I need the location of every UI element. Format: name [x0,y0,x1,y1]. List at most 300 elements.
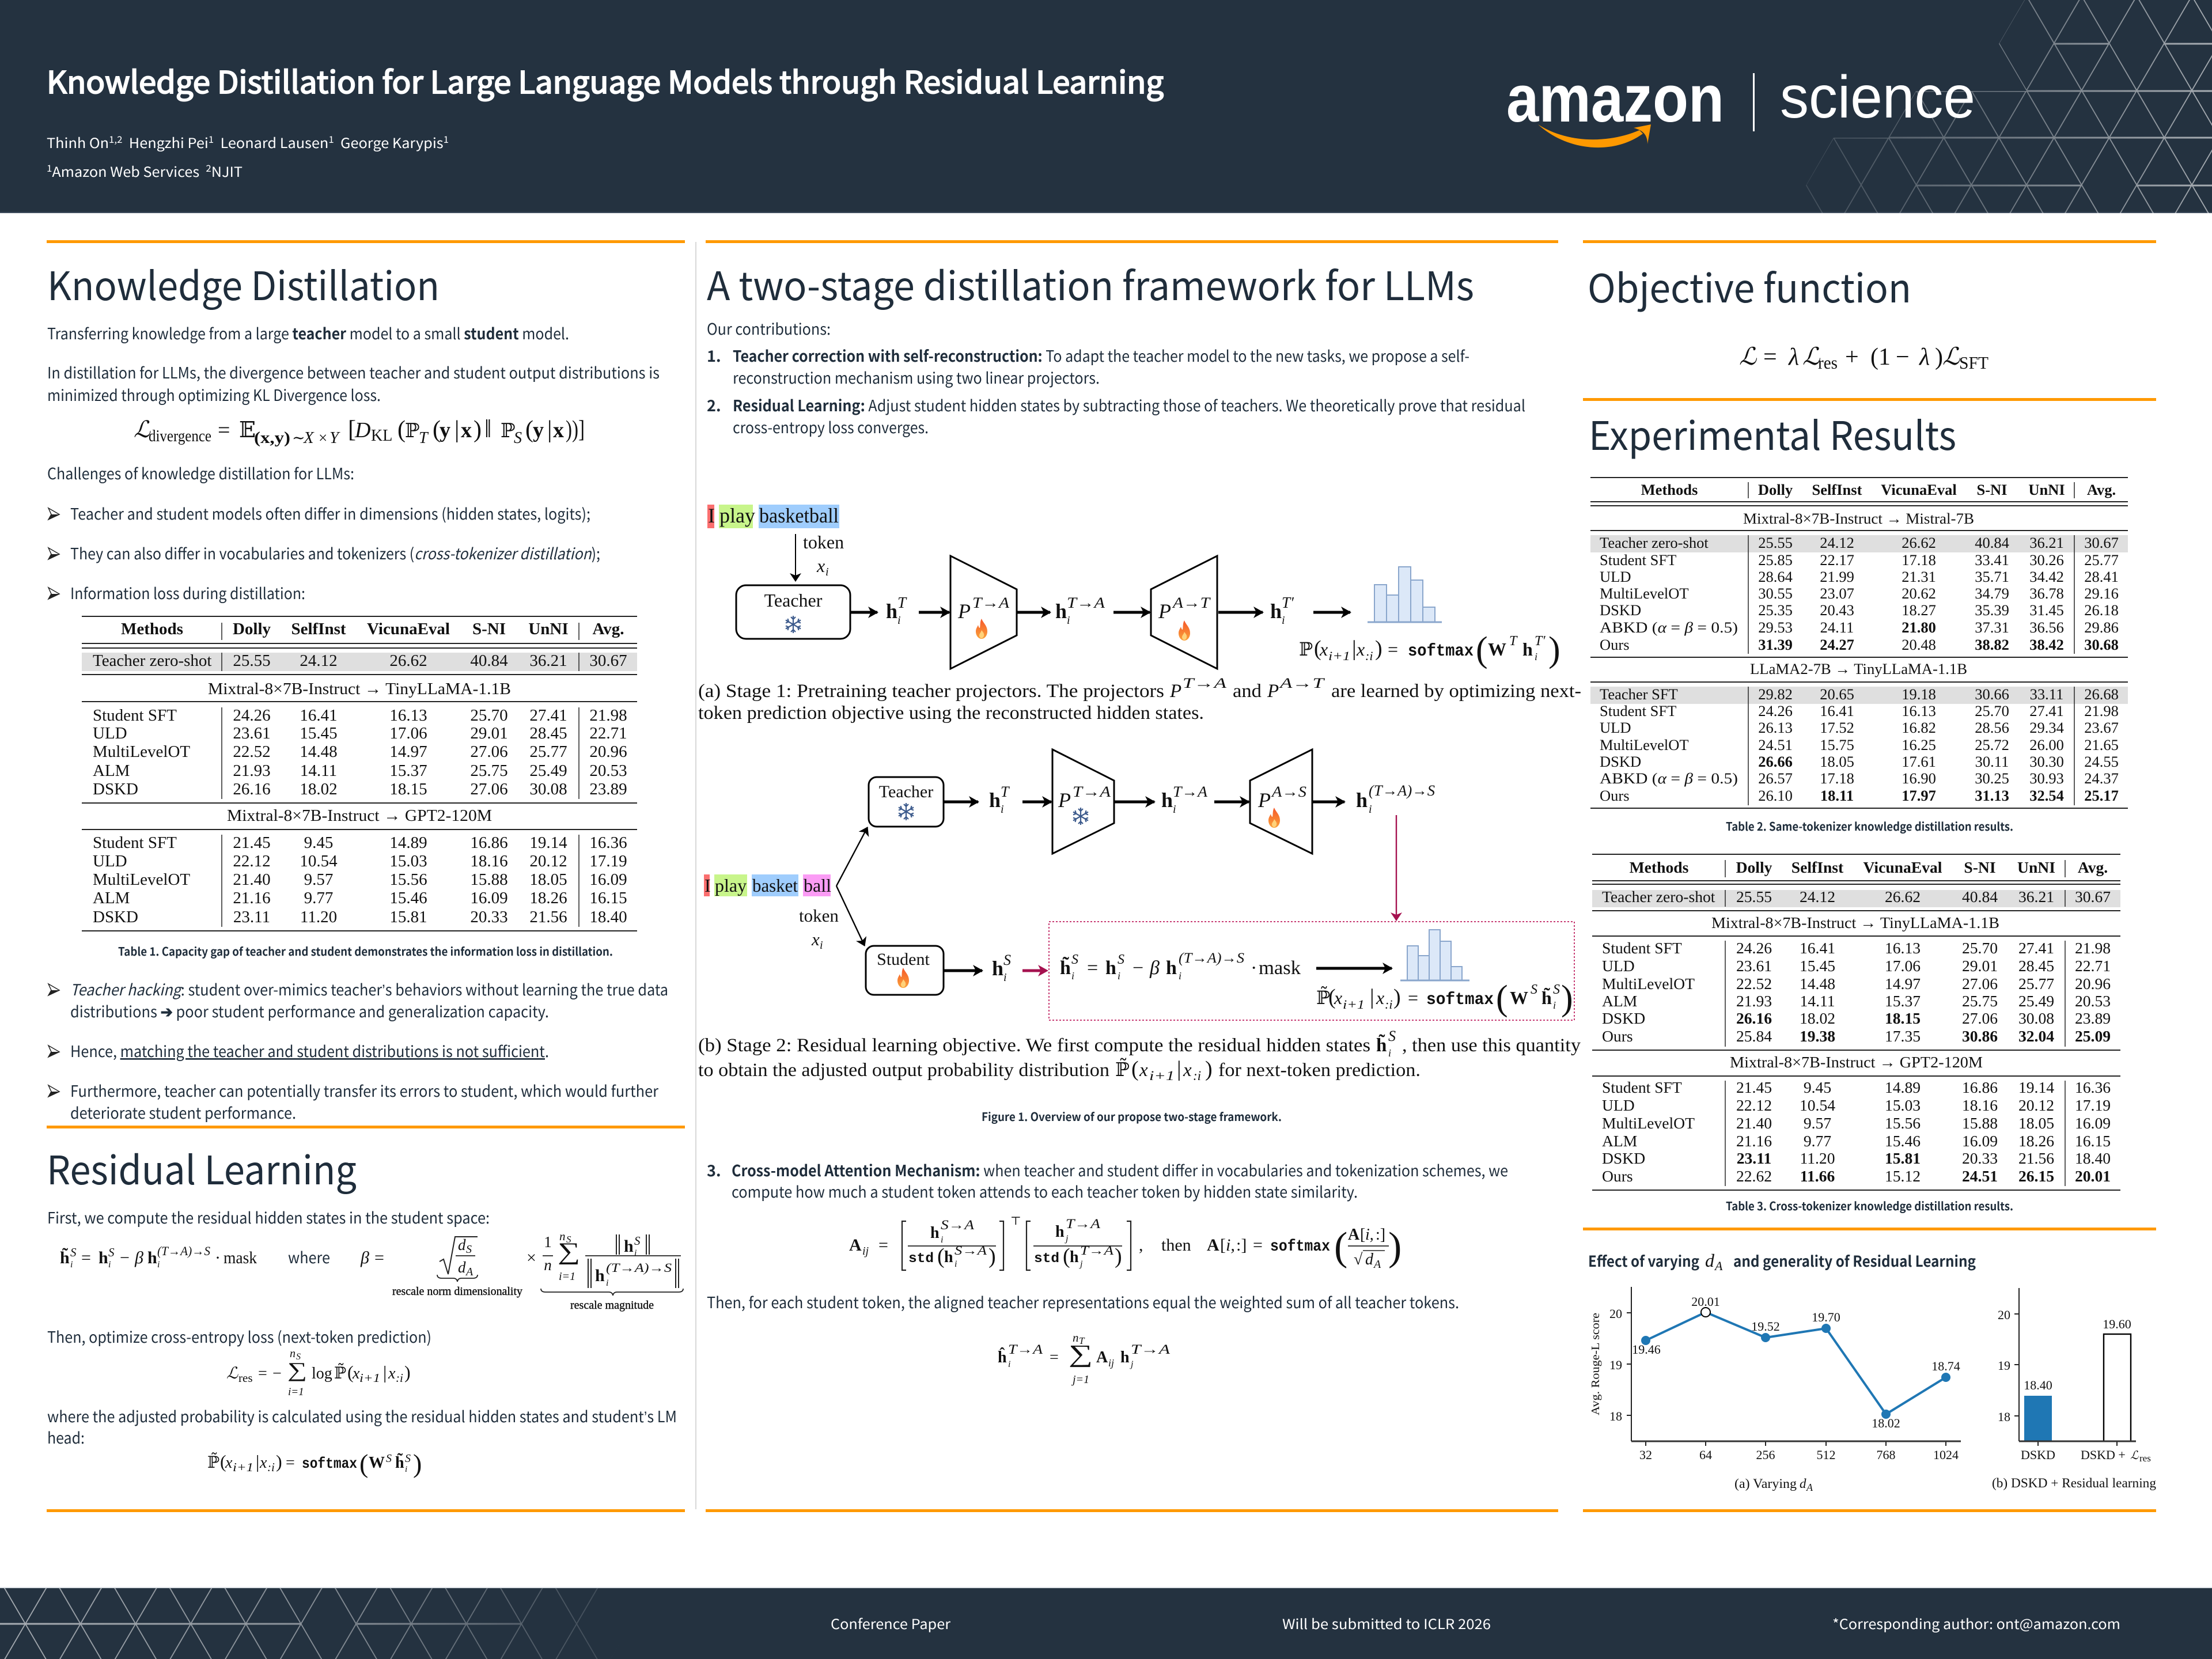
table 3: 16.36 [2075,1078,2111,1096]
figure b: stage 2 diagram: P [1058,789,1071,812]
table 2: LLaMA2-7B → TinyLLaMA-1.1B [1750,660,1967,677]
formula: residual hidden state: i [108,1260,111,1270]
bar chart: DSKD vs residual learning: DSKD [2021,1448,2055,1462]
table 3: 20.12 [2018,1096,2054,1114]
table 3: 18.40 [2075,1149,2111,1167]
figure a: stage 1 diagram: play [719,504,755,527]
table 1: 21.16 [233,889,271,907]
table 1: 30.67 [589,652,627,670]
figure a: stage 1 diagram: ) [1375,637,1382,661]
table 2: Teacher zero-shot [1600,534,1709,551]
table 1: 16.15 [589,889,627,907]
figure b caption: i [1388,1047,1391,1059]
table 1: 15.56 [389,870,427,889]
table 2: 24.26 [1758,702,1793,719]
formula: attention matrix: then [1161,1236,1191,1255]
table 3: 15.03 [1885,1096,1921,1114]
figure b: stage 2 diagram: Student [877,950,930,969]
icon: snowflake [786,616,801,633]
table 1: 36.21 [529,652,567,670]
figure a: stage 1 diagram: softmax [1408,642,1474,661]
figure b: stage 2 diagram: ( [1496,979,1508,1018]
line chart: varying dA: 19.70 [1812,1310,1840,1324]
title: Knowledge Distillation for Large Language Models through Residual Learning [47,59,1164,103]
line chart: varying dA: 19.46 [1632,1342,1661,1357]
figure b: stage 2 diagram: x [1334,987,1342,1008]
table 3: 14.97 [1885,975,1921,993]
formula: KL divergence: y [533,418,544,442]
formula: attention matrix: ( [1063,1244,1070,1268]
formula: attention matrix: T→A [1066,1217,1101,1231]
authors: Leonard Lausen [214,132,328,152]
formula: KL divergence: (x,y) [254,429,290,447]
formula: residual hidden state: S [566,1234,571,1245]
heading: Residual Learning [47,1139,357,1196]
figure a: stage 1 diagram: x [816,555,825,576]
table 3: 21.45 [1736,1078,1772,1096]
table 2: 23.07 [1820,585,1854,602]
formula: adjusted probability: ) [276,1451,282,1472]
table 2: 28.64 [1758,568,1793,585]
table 3: 32.04 [2018,1027,2054,1045]
table 2: 31.45 [2029,601,2064,619]
formula: attention matrix: ) [1388,1225,1402,1269]
figure b: stage 2 diagram: x [1376,987,1384,1008]
formula: adjusted probability: ℙ̃ [207,1452,219,1472]
table 2: Avg. [2087,481,2116,498]
table 2: 25.35 [1758,601,1793,619]
formula: objective: ℒ [1739,342,1757,370]
table 2: VicunaEval [1881,481,1957,498]
amazon science logo: science [1780,64,1975,131]
table 3: 40.84 [1962,888,1998,906]
formula: attention matrix: A [1207,1236,1219,1255]
table 3: 19.14 [2018,1078,2054,1096]
table 1: SelfInst [291,620,346,638]
figure a: stage 1 diagram: basketball [759,504,839,527]
table 3: 15.37 [1885,992,1921,1010]
figure b caption: :i [1193,1069,1201,1083]
table 3: 20.33 [1962,1149,1998,1167]
formula: objective: ℒ [1942,342,1960,370]
formula: residual loss: :i [396,1371,403,1385]
figure b: stage 2 diagram: − [1132,957,1143,979]
formula: KL divergence: × [319,429,327,446]
table 3: ALM [1602,1132,1637,1150]
table 3: 25.70 [1962,939,1998,957]
table 3: Avg. [2078,858,2108,876]
table 3: 25.84 [1736,1027,1772,1045]
figure b: stage 2 diagram: | [1370,985,1374,1009]
figure b caption: ( [1131,1057,1139,1081]
authors: 1 [209,132,214,146]
authors: Hengzhi Pei [122,132,209,152]
table 1: 18.15 [389,780,427,798]
figure a: stage 1 diagram: ( [1476,630,1488,669]
formula: residual hidden state: rescale magnitude [570,1299,654,1312]
table 1: 21.45 [233,834,271,852]
table 2: 36.56 [2029,619,2064,636]
bullet list: teacher hacking [48,978,668,1123]
figure b: stage 2 diagram [704,749,1574,1020]
table 3: 26.16 [1736,1009,1772,1027]
figure b: stage 2 diagram: basket [752,875,798,896]
table 2: 24.37 [2084,770,2119,787]
authors: George Karypis [334,132,444,152]
formula: aligned representation: j=1 [1071,1373,1089,1386]
table 2: 21.80 [1902,619,1936,636]
table 1: ULD [93,852,127,870]
table 2: 20.43 [1820,601,1854,619]
table 1: 20.12 [529,852,567,870]
table 2: 23.67 [2084,719,2119,736]
contributions list: Teacher correction with self-reconstruction: To adapt the teacher model to the new tasks, we propose a self- [733,344,1469,366]
table 3: 17.06 [1885,957,1921,975]
contributions list: reconstruction mechanism using two linear projectors. [733,366,1100,388]
chart title: Effect of varying [1588,1250,1699,1271]
bar chart: DSKD vs residual learning: 18.40 [2024,1378,2052,1392]
item 3: cross-model attention: compute how much a student token attends to each teacher token by hidden state similarity. [732,1180,1358,1202]
formula: KL divergence: x [553,418,564,442]
table 3: 24.12 [1800,888,1835,906]
table 3: 10.54 [1800,1096,1835,1114]
table 1: Mixtral-8×7B-Instruct → TinyLLaMA-1.1B [208,680,511,698]
table 3: 15.12 [1885,1167,1921,1185]
figure a: stage 1 diagram: h [1522,639,1533,660]
table 3: 19.38 [1800,1027,1835,1045]
figure b: stage 2 diagram: token [799,906,839,926]
table 1: 9.57 [304,870,333,889]
table 1: MultiLevelOT [93,870,190,889]
figure a: stage 1 diagram: ) [1548,630,1560,669]
formula: attention matrix: i [955,1259,957,1269]
table 1: 23.61 [233,724,271,743]
table 1: 18.02 [300,780,338,798]
footer: contact: *Corresponding author: ont@amazon.com [1832,1613,2120,1633]
formula: attention matrix: S→A [941,1218,975,1232]
table 1: 11.20 [300,908,337,926]
figure b: stage 2 diagram: play [715,875,747,896]
formula: KL divergence: ) [474,416,482,443]
table 3: 22.12 [1736,1096,1772,1114]
formula: objective: res [1818,353,1838,373]
figure a caption: T→A [1183,676,1227,691]
figure a: stage 1 diagram: T [897,594,907,611]
formula: residual loss: ∑ [287,1358,307,1381]
table 2 [1590,478,2128,808]
table 1: 22.12 [233,852,271,870]
formula: residual hidden state: i [606,1278,608,1288]
formula: aligned representation: n [1073,1331,1078,1344]
table 1: 16.41 [300,706,338,725]
formula: objective: = [1763,344,1777,370]
table 1: VicunaEval [367,620,450,638]
bullet list: challenges: Information loss during distillation: [70,581,305,604]
bullet list: teacher hacking: Furthermore, teacher can potentially transfer its errors to student, which would further [70,1079,658,1101]
line chart: varying dA: A [1806,1482,1813,1493]
formula: residual loss: ℙ̃ [334,1363,346,1382]
formula: KL divergence: ℙ [501,419,516,442]
table 2: 25.70 [1975,702,2009,719]
table 1: 14.89 [389,834,427,852]
formula: adjusted probability: = [286,1454,295,1472]
formula: residual loss: x [352,1365,360,1382]
figure b: stage 2 diagram: h [1166,957,1177,979]
formula: residual loss: x [388,1365,396,1382]
formula: aligned representation: i [1008,1359,1010,1369]
table 3: Student SFT [1602,939,1682,957]
table 1: 16.86 [470,834,508,852]
table 2: 21.31 [1902,568,1936,585]
formula: attention matrix: [ [1360,1226,1365,1244]
table 3: 24.51 [1962,1167,1998,1185]
formula: adjusted probability: ( [359,1449,368,1478]
figure b caption: x [1139,1060,1148,1081]
formula: adjusted probability: :i [267,1460,275,1474]
text: cross entropy: Then, optimize cross-entropy loss (next-token prediction) [47,1325,431,1347]
contributions list: Our contributions: [707,317,831,339]
bar chart: DSKD vs residual learning: ℒ [2130,1448,2139,1462]
line chart: varying dA: 18.02 [1872,1416,1900,1430]
table 2: 25.72 [1975,736,2009,753]
table 3: 30.67 [2075,888,2111,906]
table 1: 9.45 [304,834,333,852]
table 2: 30.68 [2084,636,2119,653]
table 3: 21.16 [1736,1132,1772,1150]
table 3: 16.15 [2075,1132,2111,1150]
formula: attention matrix: = [878,1236,888,1255]
table 1: 18.16 [470,852,508,870]
table 3: 25.09 [2075,1027,2111,1045]
figure a caption: token prediction objective using the reconstructed hidden states. [698,703,1204,724]
table 3: 16.41 [1800,939,1835,957]
intro text: Transferring knowledge from a large teacher model to a small student model. [47,321,569,344]
heading: Objective function [1588,257,1911,314]
table 3: 11.20 [1800,1149,1835,1167]
figure b: stage 2 diagram: T→A [1073,783,1111,800]
formula: attention matrix: ) [1115,1244,1122,1268]
table 2: 20.62 [1902,585,1936,602]
figure a: stage 1 diagram: | [1352,637,1357,661]
table 2: ABKD ( α = β = 0.5) [1600,619,1733,636]
formula: objective: λ [1787,344,1799,370]
table 3: 26.15 [2018,1167,2054,1185]
figure b: stage 2 diagram: I [704,875,711,896]
formula: residual hidden state: rescale norm dimensionality [392,1285,522,1298]
formula: attention matrix: std [1034,1251,1059,1267]
figure a caption: P [1169,681,1181,702]
table 2: 24.51 [1758,736,1793,753]
authors: 1 [444,132,449,146]
formula: attention matrix: ( [1334,1225,1347,1269]
table 2: 31.13 [1975,787,2009,804]
formula: residual hidden state: (T→A)→S [157,1244,210,1258]
table 2: 22.17 [1820,551,1854,569]
table 2: 24.12 [1820,534,1854,551]
formula: residual hidden state: S [70,1245,77,1259]
panel: knowledge distillation [47,255,668,1123]
figure b: stage 2 diagram: :i [1385,997,1392,1012]
figure a caption: A→T [1278,676,1325,691]
figure a: stage 1 diagram: A→T [1172,594,1211,611]
figure b: stage 2 diagram: Teacher [879,782,933,801]
table 1: Student SFT [93,834,177,852]
line chart: varying dA: 768 [1877,1448,1895,1462]
figure b caption: | [1177,1057,1181,1081]
table 2: 35.39 [1975,601,2009,619]
figure b: stage 2 diagram: A→S [1271,783,1306,800]
table 3: 20.96 [2075,975,2111,993]
table 1: ULD [93,724,127,743]
figure a: stage 1 diagram: ℙ [1299,638,1313,660]
formula: residual hidden state: 1 [544,1233,552,1251]
table 2: 30.67 [2084,534,2119,551]
figure b: stage 2 diagram: · [1251,957,1257,979]
table 1: 10.54 [300,852,338,870]
formula: residual hidden state: h [147,1248,157,1267]
figure a: stage 1 diagram: P [957,600,971,623]
table 3: 23.89 [2075,1009,2111,1027]
figure b: stage 2 diagram: S [1553,982,1560,997]
table 3: Methods [1630,858,1689,876]
figure b: stage 2 diagram: h [989,789,1001,812]
table 2: 17.18 [1820,770,1854,787]
bullet list: challenges [48,502,600,604]
table 1: 21.98 [589,706,627,725]
figure b: stage 2 diagram: T→A [1173,783,1207,800]
formula: attention matrix: S→A [955,1243,987,1257]
figure b caption: (b) Stage 2: Residual learning objective. We first compute the residual hidden states [698,1035,1370,1056]
table 2: 15.75 [1820,736,1854,753]
table 2: Ours [1600,787,1630,804]
table 1: 18.26 [529,889,567,907]
table 2: Student SFT [1600,551,1676,569]
table 1: ALM [93,889,130,907]
bar chart: DSKD vs residual learning: 20 [1998,1308,2010,1322]
bar chart: DSKD vs residual learning [1992,1288,2156,1490]
table 3: 21.40 [1736,1114,1772,1132]
formula: residual hidden state: h [624,1237,634,1256]
table 2: 26.62 [1902,534,1936,551]
text: residual hidden states: First, we compute the residual hidden states in the student space: [47,1206,490,1228]
table 3: SelfInst [1791,858,1844,876]
table 1: 23.11 [233,908,270,926]
table 3: Mixtral-8×7B-Instruct → GPT2-120M [1730,1053,1983,1071]
table 1 [82,616,637,931]
formula: attention matrix: ) [988,1244,996,1268]
table 1: Mixtral-8×7B-Instruct → GPT2-120M [227,806,492,825]
table 2: Student SFT [1600,702,1676,719]
figure a: stage 1 diagram: i [1067,614,1070,627]
table 2: 36.21 [2029,534,2064,551]
formula: attention matrix: :] [1376,1226,1385,1244]
table 2: ABKD ( α = β = 0.5) [1600,770,1733,787]
bar chart: DSKD vs residual learning: 19 [1998,1358,2010,1373]
table 3: 18.26 [2018,1132,2054,1150]
formula: attention matrix: d [1365,1251,1374,1268]
table 1: 18.05 [529,870,567,889]
figure a: stage 1 diagram: h [886,600,897,623]
line chart: varying dA [1589,1287,1961,1493]
challenges heading: Challenges of knowledge distillation for LLMs: [47,461,354,484]
amazon science logo [1506,61,1975,147]
figure a: stage 1 diagram: :i [1365,649,1373,663]
table 1: 15.03 [389,852,427,870]
bar chart: DSKD vs residual learning: res [2139,1453,2151,1464]
table 2: 18.05 [1820,753,1854,770]
footer: conference: Conference Paper [831,1613,951,1633]
table 1: 15.46 [389,889,427,907]
table 2: 20.48 [1902,636,1936,653]
figure b: stage 2 diagram: i+1 [1343,997,1365,1012]
table 2: 27.41 [2029,702,2064,719]
formula: residual loss: | [383,1362,387,1382]
table 3: 22.52 [1736,975,1772,993]
table 3: 22.62 [1736,1167,1772,1185]
panel: effect of varying dA [1588,1250,2156,1493]
formula: attention matrix: std [908,1251,934,1267]
table 2: 33.11 [2030,685,2063,703]
table 3: Student SFT [1602,1078,1682,1096]
table 3: 24.26 [1736,939,1772,957]
formula: KL divergence: ( [525,416,533,443]
table 2: ULD [1600,719,1631,736]
bullet list: teacher hacking: Teacher hacking: student over-mimics teacher’s behaviors without learning the true data [70,978,668,1000]
intro text [47,321,660,406]
formula: residual loss: n [290,1347,296,1360]
bullet list: teacher hacking: distributions ➔ poor student performance and generalization capacity. [70,999,549,1022]
table 3: 23.61 [1736,957,1772,975]
formula: residual hidden state: h [595,1266,605,1285]
table 1: 26.62 [389,652,427,670]
figure b caption: x [1183,1060,1192,1081]
icon: histogram [1368,567,1442,622]
header banner [0,0,2212,213]
formula: residual hidden state: · [215,1248,221,1267]
table 2: 34.79 [1975,585,2009,602]
figure a caption: P [1267,681,1279,702]
formula: KL divergence: [ [348,416,356,443]
figure b: stage 2 diagram: T [1001,783,1010,800]
figure b: stage 2 diagram: W [1510,987,1528,1008]
table 3 [1592,854,2120,1190]
table 3: 15.88 [1962,1114,1998,1132]
table 1: 26.16 [233,780,271,798]
formula: residual loss: i=1 [288,1386,304,1398]
formula: KL divergence: x [461,418,472,442]
formula: residual hidden state: mask [224,1248,257,1267]
figure b: stage 2 diagram: mask [1259,957,1301,979]
formula: aligned representation: T→A [1131,1342,1171,1357]
figure b: stage 2 diagram: x [811,929,820,949]
figure b caption: i+1 [1149,1069,1175,1083]
formula: adjusted probability: ) [413,1449,422,1478]
table 1: 15.88 [470,870,508,889]
table 2: Teacher SFT [1600,685,1678,703]
table 2: Ours [1600,636,1630,653]
table 3: 21.93 [1736,992,1772,1010]
table 3: 11.66 [1800,1167,1835,1185]
table 2: Dolly [1758,481,1793,498]
formula: adjusted probability: S [386,1452,392,1465]
table 3: 27.06 [1962,1009,1998,1027]
line chart: varying dA: 256 [1756,1448,1775,1462]
table 1: 15.37 [389,762,427,780]
footer: venue: Will be submitted to ICLR 2026 [1282,1613,1491,1633]
table 2: 24.11 [1820,619,1854,636]
table 1: DSKD [93,780,138,798]
table 3: S-NI [1964,858,1996,876]
